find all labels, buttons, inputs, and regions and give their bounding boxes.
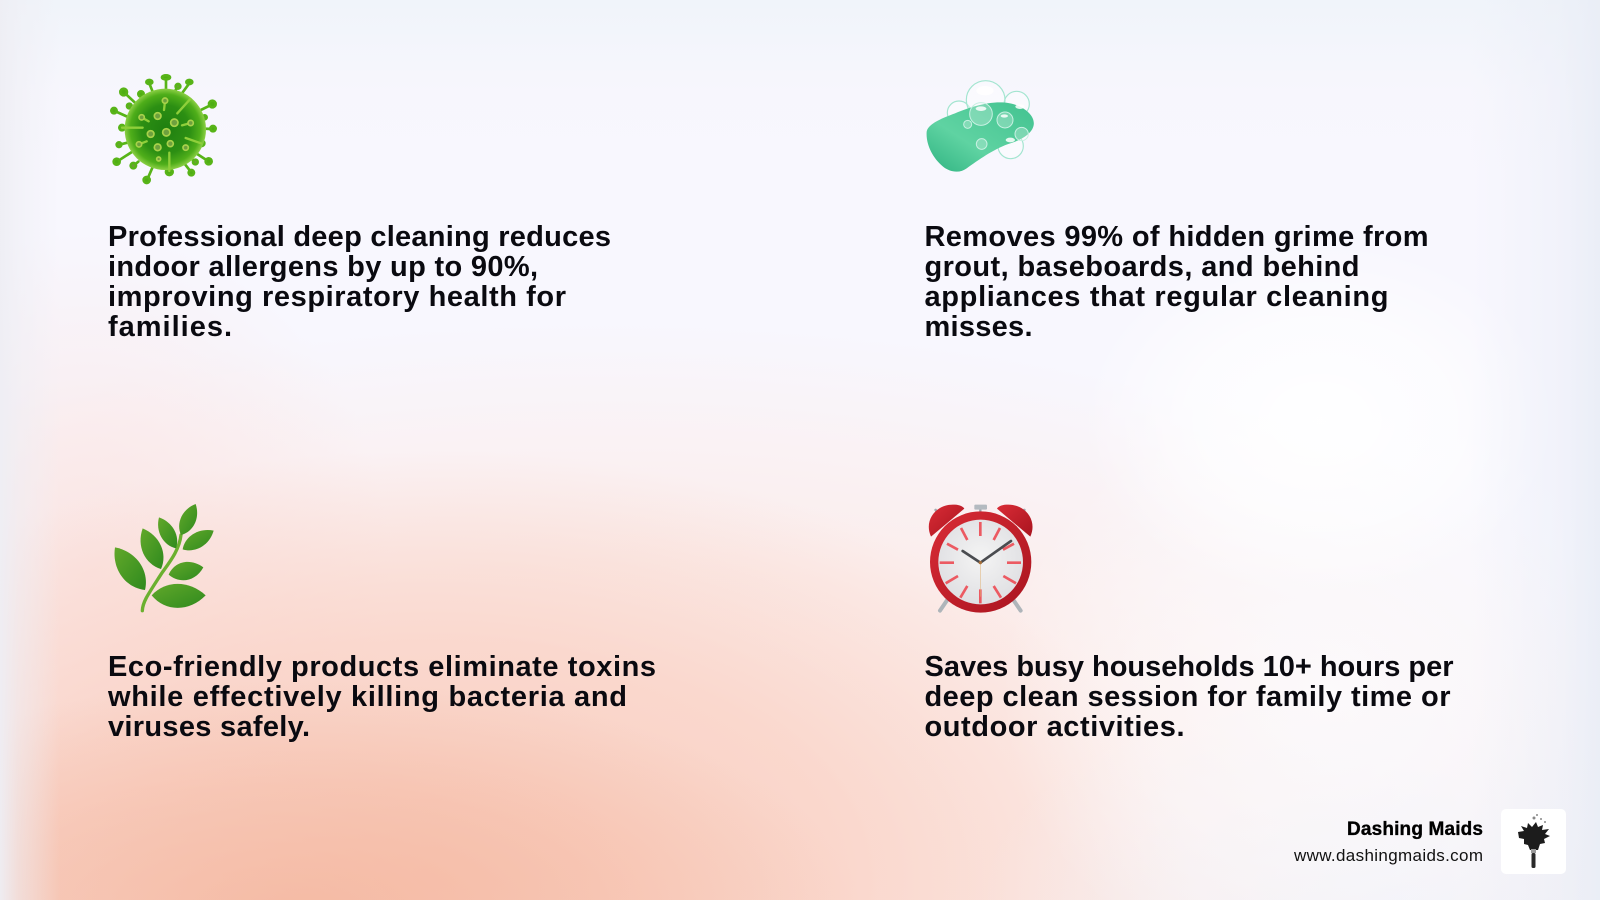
text: time savings benefit: Saves busy households 10+ hours per <box>924 651 1454 683</box>
icon: green soap with bubbles <box>927 81 1034 172</box>
text: hidden grime benefit <box>924 221 1428 343</box>
text: hidden grime benefit: appliances that regular cleaning <box>924 281 1388 313</box>
text: allergens benefit: improving respiratory health for <box>108 281 566 313</box>
text: allergens benefit: Professional deep cleaning reduces <box>108 221 611 253</box>
text: hidden grime benefit: Removes 99% of hidden grime from <box>924 221 1428 253</box>
icon: green virus <box>111 75 216 183</box>
text: time savings benefit <box>924 651 1454 743</box>
icon: red alarm clock <box>929 505 1033 613</box>
text: eco-friendly benefit: Eco-friendly products eliminate toxins <box>108 651 656 683</box>
text: allergens benefit: families. <box>108 311 232 343</box>
text: hidden grime benefit: grout, baseboards, and behind <box>924 251 1360 283</box>
text: eco-friendly benefit <box>107 651 656 743</box>
text: time savings benefit: deep clean session for family time or <box>924 681 1450 713</box>
text: allergens benefit: indoor allergens by up to 90%, <box>108 251 538 283</box>
footer: brand name and website: Dashing Maids <box>1347 819 1483 840</box>
footer: brand name and website <box>1293 819 1483 865</box>
logo: feather duster <box>1501 809 1566 874</box>
icon: green leafy branch <box>114 504 214 611</box>
footer: brand name and website: www.dashingmaids.com <box>1293 846 1483 865</box>
text: allergens benefit <box>108 221 611 343</box>
text: eco-friendly benefit: while effectively killing bacteria and <box>107 681 627 713</box>
text: eco-friendly benefit: viruses safely. <box>108 711 310 743</box>
text: time savings benefit: outdoor activities. <box>924 711 1184 743</box>
text: hidden grime benefit: misses. <box>924 311 1032 343</box>
